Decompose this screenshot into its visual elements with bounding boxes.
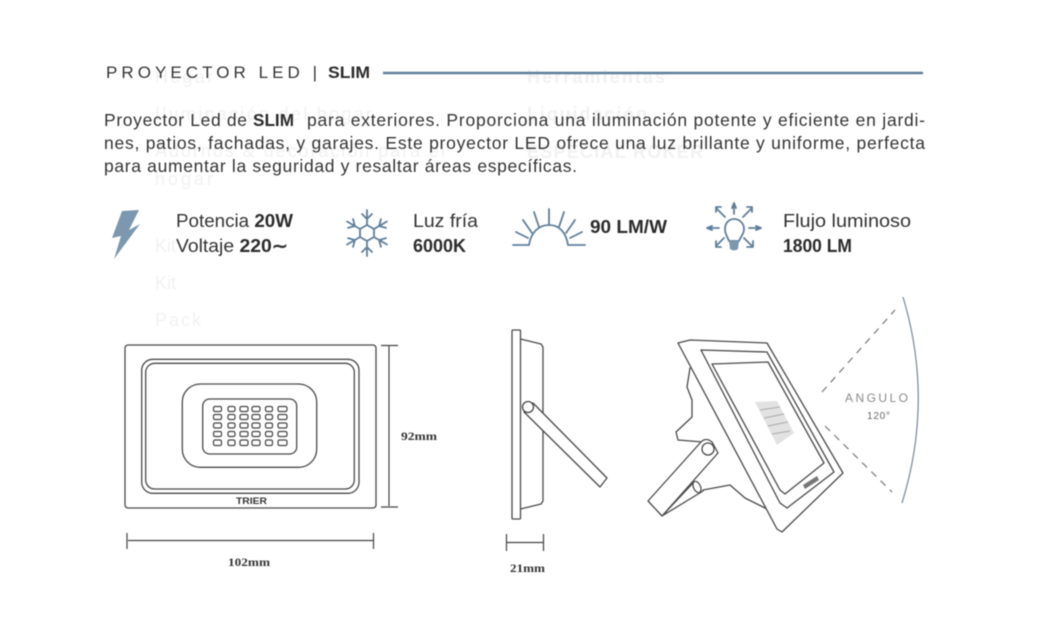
dimension: height 92mm bbox=[381, 346, 437, 507]
icon: light bulb with arrows bbox=[707, 203, 761, 250]
description text: Proyector Led de bbox=[104, 110, 247, 130]
faint background menu text: hogar bbox=[155, 169, 213, 189]
title: PROYECTOR LED | bbox=[106, 63, 317, 82]
description text bbox=[104, 110, 925, 176]
power and voltage spec: Potencia 20W bbox=[176, 211, 293, 231]
description text: SLIM bbox=[253, 110, 294, 130]
luminous flux spec: Flujo luminoso bbox=[783, 211, 911, 231]
brand plate bbox=[803, 476, 819, 489]
luminous flux spec: 1800 LM bbox=[783, 236, 852, 256]
dimension: width 102mm: 102mm bbox=[228, 555, 270, 569]
icon: sun rays bbox=[513, 209, 585, 245]
beam angle diagram: 120° bbox=[867, 411, 890, 422]
dimension: depth 21mm bbox=[506, 534, 545, 575]
title rule bbox=[383, 72, 923, 74]
perspective view drawing bbox=[648, 340, 843, 532]
faint background menu text: ESPECIAL ROKER bbox=[527, 142, 703, 162]
faint background menu text: Kit bbox=[155, 273, 176, 293]
front view drawing bbox=[125, 345, 376, 508]
led patch bbox=[755, 401, 794, 445]
dimension: height 92mm: 92mm bbox=[401, 429, 437, 443]
beam angle diagram: ANGULO bbox=[845, 391, 908, 405]
efficacy spec: 90 LM/W bbox=[590, 217, 667, 237]
colour temperature spec bbox=[413, 211, 479, 256]
title: SLIM bbox=[328, 63, 370, 82]
beam angle diagram bbox=[822, 297, 918, 503]
description text: para aumentar la seguridad y resaltar áreas específicas. bbox=[104, 156, 577, 176]
faint background menu text: Adornos & decoración para el bbox=[155, 141, 445, 161]
faint background menu text: Hogar bbox=[155, 67, 213, 87]
icon: lightning bolt bbox=[112, 210, 140, 259]
side view drawing bbox=[512, 330, 607, 519]
description text: para exteriores. Proporciona una iluminación potente y eficiente en jardi- bbox=[307, 110, 925, 130]
faint background menu text: Liquidación bbox=[527, 104, 647, 124]
icon: snowflake bbox=[345, 210, 389, 256]
faint background menu text: Iluminación del hogar bbox=[155, 104, 372, 124]
faint background menu text: Herramientas bbox=[527, 67, 665, 87]
dimension: width 102mm bbox=[127, 533, 374, 569]
faint background menu text: Kit bbox=[155, 236, 176, 256]
dimension: depth 21mm: 21mm bbox=[510, 561, 545, 575]
brand label: TRIER bbox=[236, 496, 268, 506]
description text: nes, patios, fachadas, y garajes. Este proyector LED ofrece una luz brillante y uniforme, perfecta bbox=[104, 133, 925, 153]
power and voltage spec bbox=[176, 211, 293, 256]
colour temperature spec: Luz fría bbox=[413, 211, 479, 231]
colour temperature spec: 6000K bbox=[413, 236, 466, 256]
faint background menu text bbox=[155, 67, 703, 330]
power and voltage spec: Voltaje 220∼ bbox=[176, 236, 288, 256]
faint background menu text: Pack bbox=[155, 310, 202, 330]
led array bbox=[214, 406, 287, 446]
luminous flux spec bbox=[783, 211, 911, 256]
